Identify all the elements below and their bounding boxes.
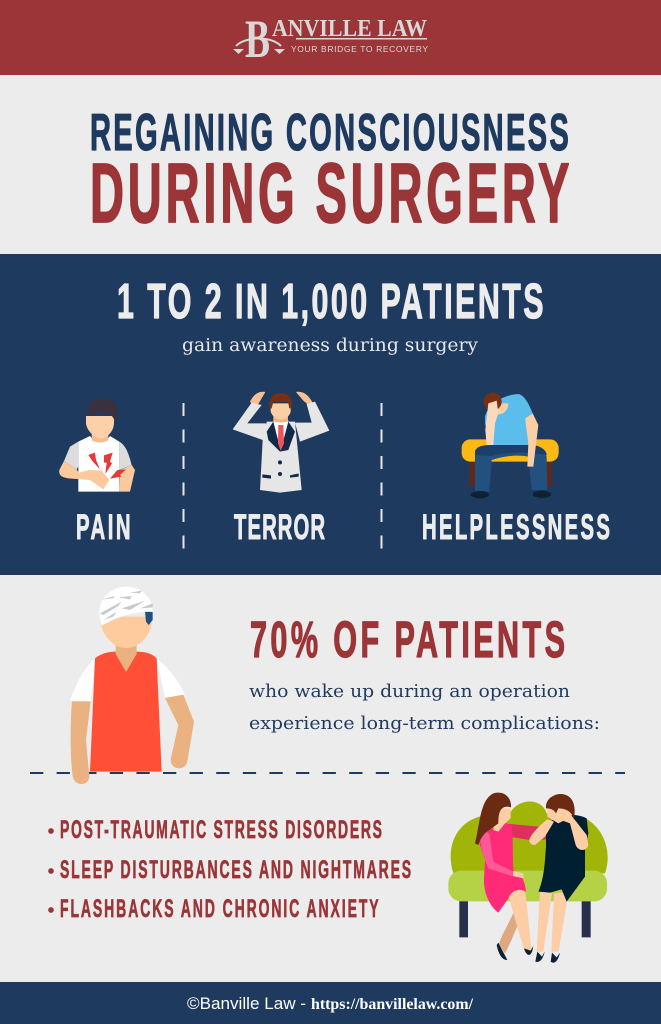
title: REGAINING CONSCIOUSNESS bbox=[90, 103, 569, 161]
icon: helpless man on bench bbox=[462, 393, 559, 498]
list: complications: FLASHBACKS AND CHRONIC ANXIETY bbox=[60, 896, 379, 923]
icon: man in pain bbox=[59, 398, 135, 492]
label: helplessness: HELPLESSNESS bbox=[422, 508, 610, 548]
icon: two women on sofa bbox=[448, 793, 608, 963]
footer text: source: ©Banville Law - bbox=[187, 994, 306, 1013]
panel: footer bbox=[0, 982, 661, 1024]
label: terror: TERROR bbox=[234, 508, 325, 548]
panel: awareness statistics bbox=[0, 254, 661, 575]
title: DURING SURGERY bbox=[90, 147, 569, 241]
logo: Banville Law: YOUR BRIDGE TO RECOVERY bbox=[291, 44, 428, 54]
logo: Banville Law: B bbox=[245, 9, 270, 69]
text: long-term complications bbox=[249, 681, 600, 734]
title bbox=[90, 103, 569, 241]
icon: terrified man bbox=[233, 392, 329, 493]
footer text: source bbox=[187, 994, 474, 1013]
footer text: source: https://banvillelaw.com/ bbox=[311, 996, 474, 1013]
label: pain: PAIN bbox=[76, 508, 131, 548]
heading: 70% of patients: 70% OF PATIENTS bbox=[250, 611, 565, 668]
divider bbox=[184, 403, 382, 562]
text: long-term complications: experience long-term complications: bbox=[249, 713, 600, 734]
panel: header banner bbox=[0, 0, 661, 75]
list: complications: SLEEP DISTURBANCES AND NIGHTMARES bbox=[60, 857, 411, 884]
text: long-term complications: who wake up during an operation bbox=[249, 681, 570, 702]
list: complications bbox=[48, 817, 411, 923]
heading: 1 to 2 in 1,000 patients: 1 TO 2 IN 1,000 PATIENTS bbox=[117, 274, 544, 329]
subheading: gain awareness during surgery bbox=[182, 336, 478, 356]
divider bbox=[30, 772, 625, 774]
list: complications: POST-TRAUMATIC STRESS DISORDERS bbox=[60, 817, 382, 844]
logo: Banville Law bbox=[233, 9, 428, 69]
icon: bandaged patient bbox=[70, 587, 194, 784]
logo: Banville Law: ANVILLE LAW bbox=[272, 16, 427, 42]
